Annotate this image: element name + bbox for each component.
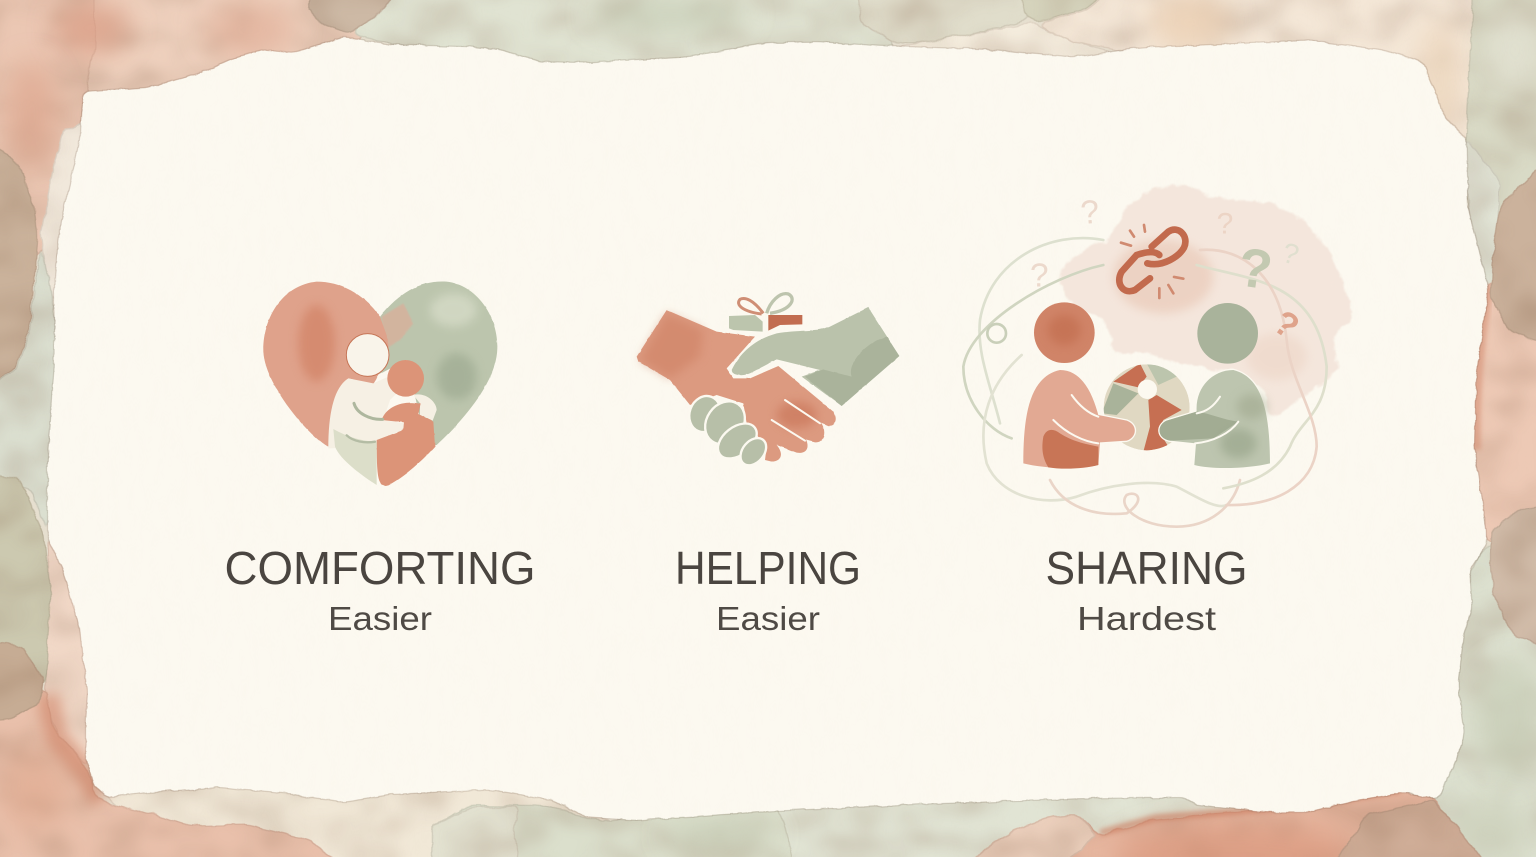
icon: two figures sharing a ball xyxy=(963,183,1353,527)
question marks: ? xyxy=(1266,303,1306,347)
icon: handshake with gift xyxy=(637,294,899,470)
child arm xyxy=(413,394,437,421)
ball xyxy=(1102,363,1190,452)
parent arm strokes xyxy=(354,403,383,419)
tangled threads xyxy=(963,238,1327,527)
wash: right green xyxy=(1466,0,1536,345)
wash: left pink xyxy=(44,530,90,770)
question marks: ? xyxy=(1079,194,1101,232)
wash: top khaki xyxy=(855,0,1030,44)
question marks xyxy=(1030,194,1306,347)
heading: helping: HELPING xyxy=(675,542,861,594)
wash: bottom beige xyxy=(100,780,620,857)
sage fingers xyxy=(684,392,771,470)
wash: right green lower xyxy=(1380,545,1536,857)
label: easier: Easier xyxy=(328,600,432,637)
question marks: ? xyxy=(1030,258,1049,295)
wash: top soft beige xyxy=(885,22,1140,70)
label: hardest: Hardest xyxy=(1077,600,1216,637)
blush cloud xyxy=(1060,183,1353,422)
column: comforting xyxy=(224,282,536,637)
heading: comforting: COMFORTING xyxy=(224,542,536,594)
wash: left olive xyxy=(0,470,50,690)
question marks: ? xyxy=(1234,235,1276,301)
parent lower sage xyxy=(333,429,377,485)
ball centre xyxy=(1138,380,1157,399)
column: helping xyxy=(637,294,899,637)
heading: sharing: SHARING xyxy=(1046,542,1248,594)
salmon hand xyxy=(637,310,836,462)
parent head xyxy=(346,334,389,376)
finger gaps xyxy=(772,400,820,441)
question marks: ? xyxy=(1217,207,1233,240)
heart right sage lobe xyxy=(373,282,497,447)
wash: top-right peach xyxy=(1035,0,1476,145)
wash: top-left salmon xyxy=(0,0,430,300)
wash: bottom-right salmon xyxy=(950,790,1490,857)
left figure xyxy=(1023,302,1135,469)
label: easier: Easier xyxy=(716,600,820,637)
column: sharing xyxy=(963,183,1353,637)
wash: right salmon xyxy=(1472,280,1536,545)
child body xyxy=(377,403,435,486)
question marks: ? xyxy=(1279,237,1302,272)
wash: top green xyxy=(350,0,895,70)
wash: bottom green left xyxy=(432,805,800,857)
parent body xyxy=(328,377,405,448)
icon: heart with parent and child xyxy=(263,282,497,486)
icon: broken chain link xyxy=(1119,225,1185,298)
gift box xyxy=(729,294,802,332)
sage hand xyxy=(732,307,899,406)
wash: top taupe blob xyxy=(308,0,412,35)
wash: bottom grey-green right xyxy=(760,790,1300,857)
wash: left brown xyxy=(0,640,44,722)
heart left salmon lobe xyxy=(263,282,388,447)
wash: bottom-left salmon xyxy=(0,690,375,857)
child head xyxy=(387,360,424,397)
right figure xyxy=(1160,303,1270,468)
wash: right taupe bottom xyxy=(1490,500,1536,655)
wash: left taupe xyxy=(0,130,38,400)
wash: left sage xyxy=(0,233,56,536)
wash: right taupe top xyxy=(1490,150,1536,350)
wash: left beige strip xyxy=(40,120,90,300)
